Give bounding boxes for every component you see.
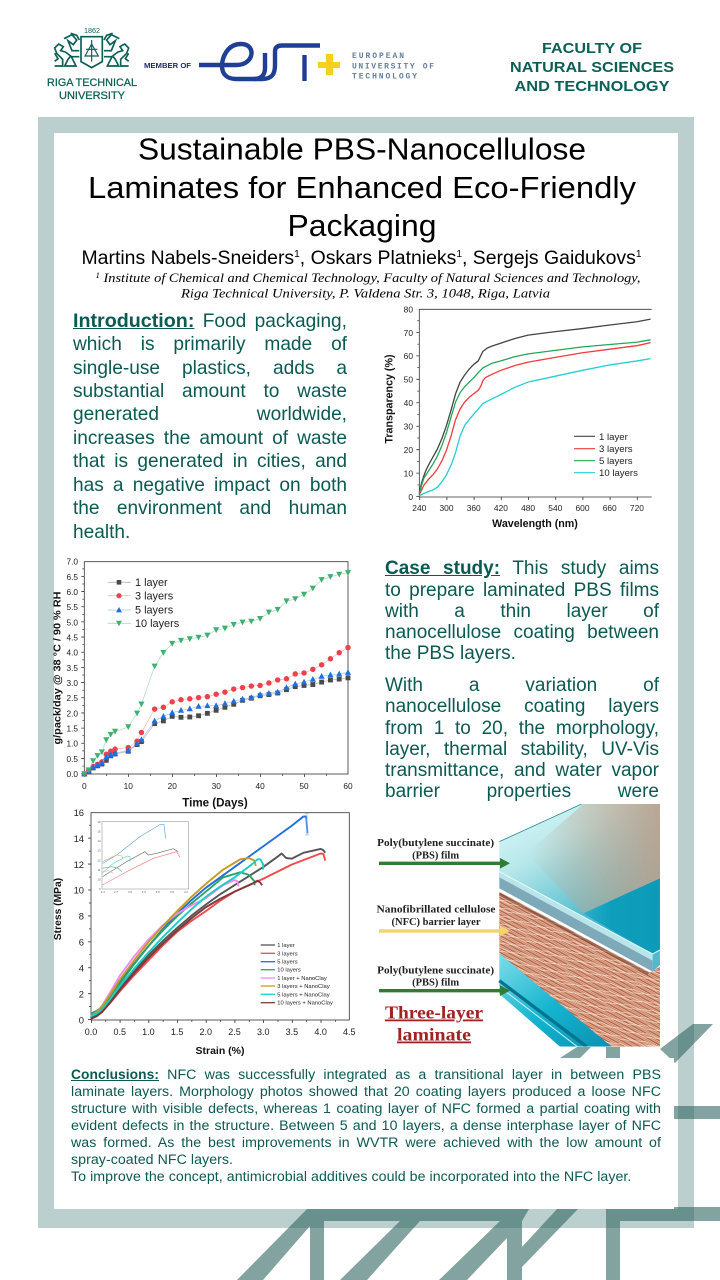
title — [88, 132, 637, 243]
chart inset: zoomed curves: 10 — [97, 877, 101, 881]
text block: case study: Case study: This study aims — [385, 558, 659, 579]
chart: stress vs strain: 6 — [79, 937, 84, 948]
chart: transparency vs wavelength: 420 — [494, 503, 508, 513]
chart: water vapor transmission over time — [52, 557, 353, 810]
text block: conclusions: was formed. As the best improvements in WVTR were achieved with the low amount of — [71, 1134, 661, 1150]
chart: stress vs strain: 4.0 — [314, 1027, 327, 1037]
heading: faculty name: FACULTY OF — [542, 40, 642, 57]
title: Laminates for Enhanced Eco-Friendly — [88, 170, 637, 205]
chart: stress vs strain: 1.0 — [142, 1027, 155, 1037]
chart inset: zoomed curves: 9 — [99, 887, 101, 891]
title: Packaging — [288, 208, 436, 243]
diagram: three-layer laminate: Three-layer — [385, 1002, 483, 1022]
chart: transparency vs wavelength: 10 — [404, 468, 413, 478]
chart: stress vs strain: 0 — [79, 1014, 84, 1025]
text block: introduction: which is primarily made of — [73, 334, 347, 355]
NFC fibre layer — [499, 892, 660, 1047]
chart: stress vs strain: 14 — [74, 833, 84, 844]
authors: , Sergejs Gaidukovs — [462, 248, 636, 269]
logo: Riga Technical University: 1862 — [84, 26, 100, 35]
chart: stress vs strain: 2.5 — [228, 1027, 241, 1037]
diagram: three-layer laminate: (NFC) barrier layer — [391, 917, 481, 928]
chart: water vapor transmission over time: 7.0 — [66, 557, 78, 567]
chart: transparency vs wavelength: 10 layers — [599, 468, 638, 479]
chart: water vapor transmission over time: 6.5 — [66, 572, 78, 582]
affiliation: Institute of Chemical and Chemical Technology, Faculty of Natural Sciences and Technology, — [100, 270, 640, 285]
decorative lattice of teal strokes — [237, 1024, 720, 1280]
text block: case study: nanocellulose coating between — [385, 622, 659, 643]
chart: water vapor transmission over time: 1.0 — [66, 739, 78, 749]
chart: water vapor transmission over time: 0.5 — [66, 754, 78, 764]
text block: introduction: generated worldwide, — [73, 404, 347, 425]
chart: water vapor transmission over time: 50 — [299, 781, 309, 791]
chart: transparency vs wavelength: 80 — [404, 304, 413, 314]
chart: water vapor transmission over time: 3 layers — [135, 590, 174, 602]
chart inset: zoomed curves — [97, 820, 189, 894]
diagram: three-layer laminate: (PBS) film — [412, 850, 459, 862]
chart legend: stress curves: 10 layers — [277, 968, 301, 974]
chart: stress vs strain: 3.5 — [286, 1027, 298, 1037]
text block: study variation: With a variation of — [385, 675, 659, 696]
logo: Riga Technical University: RIGA TECHNICAL — [47, 77, 137, 89]
chart: water vapor transmission over time: 3.0 — [66, 678, 78, 688]
chart legend: stress curves: 1 layer + NanoClay — [277, 976, 327, 982]
chart: water vapor transmission over time: 5.5 — [66, 602, 78, 612]
chart: stress vs strain — [53, 807, 356, 1057]
diagram: three-layer laminate: Poly(butylene succinate) — [377, 838, 495, 849]
text block: case study: the PBS layers. — [385, 643, 516, 664]
chart: water vapor transmission over time: g/pack/day @ 38 °C / 90 % RH — [52, 592, 64, 744]
label: member of: MEMBER OF — [144, 61, 191, 70]
arrows — [379, 858, 510, 996]
logo: European University of Technology: TECHNOLOGY — [352, 72, 417, 82]
chart: stress vs strain: 0.5 — [113, 1027, 126, 1037]
text block: conclusions: laminate layers. Morphology photos showed that 20 coating layers produced a loose NFC — [71, 1084, 661, 1100]
chart: water vapor transmission over time: 6.0 — [66, 587, 78, 597]
chart: water vapor transmission over time: 0.0 — [66, 769, 78, 779]
chart: transparency vs wavelength: 1 layer — [599, 432, 629, 443]
diagram: three-layer laminate — [374, 804, 660, 1047]
chart: stress vs strain: 10 — [74, 885, 84, 896]
chart: water vapor transmission over time: Time (Days) — [182, 796, 248, 810]
chart inset: zoomed curves: 15 — [97, 830, 101, 834]
chart: transparency vs wavelength: 720 — [630, 503, 644, 513]
lower PBS sheet — [499, 953, 623, 1047]
chart: stress vs strain: 8 — [79, 911, 84, 922]
chart: stress vs strain: Stress (MPa) — [53, 878, 64, 940]
chart: transparency vs wavelength: 30 — [404, 422, 413, 432]
authors: , Oskars Platnieks — [300, 248, 456, 269]
chart: water vapor transmission over time: 10 layers — [135, 618, 180, 630]
affiliation: Riga Technical University, P. Valdena Str. 3, 1048, Riga, Latvia — [180, 286, 551, 301]
text block: study variation: nanocellulose coating layers — [385, 696, 659, 717]
text block: conclusions — [71, 1066, 661, 1184]
diagram: three-layer laminate: Nanofibrillated cellulose — [376, 904, 496, 916]
chart: stress vs strain: 4.5 — [343, 1027, 356, 1037]
chart inset: zoomed curves: 3.6 — [156, 890, 160, 894]
diagram: three-layer laminate: Poly(butylene succinate) — [377, 966, 495, 976]
chart: water vapor transmission over time: 1 layer — [135, 577, 168, 589]
logo: European University of Technology: EUROPEAN — [352, 52, 404, 61]
chart legend: stress curves: 10 layers + NanoClay — [277, 1001, 333, 1007]
chart: water vapor transmission over time: 30 — [212, 781, 221, 791]
chart: transparency vs wavelength: Wavelength (nm) — [492, 518, 578, 530]
chart: water vapor transmission over time: 1.5 — [66, 724, 78, 734]
text block: introduction — [73, 310, 347, 543]
logo: European University of Technology: UNIVERSITY OF — [352, 62, 434, 71]
chart legend: stress curves: 3 layers — [277, 951, 298, 957]
text block: introduction: Introduction: Food packaging, — [73, 310, 347, 332]
chart inset: zoomed curves: 13 — [97, 849, 101, 853]
chart: stress vs strain: 0.0 — [85, 1027, 97, 1037]
text block: introduction: that is generated in cities, and — [73, 451, 347, 472]
upper PBS sheet — [499, 804, 660, 972]
heading: faculty name: AND TECHNOLOGY — [514, 78, 670, 95]
chart: transparency vs wavelength: 70 — [404, 328, 413, 338]
text block: study variation: layer, thermal stability, UV-Vis — [385, 739, 659, 760]
text block: case study: with a thin layer of — [385, 601, 659, 622]
text block: conclusions: evident defects in the structure. Between 5 and 10 layers, a dense interphase layer of NFC — [71, 1118, 661, 1134]
chart: water vapor transmission over time: 5 layers — [135, 605, 174, 617]
chart: stress vs strain: 1.5 — [171, 1027, 183, 1037]
panel: poster frame — [38, 117, 694, 1228]
text block: study variation — [385, 675, 660, 802]
chart inset: zoomed curves: 2.7 — [114, 890, 118, 894]
chart: stress vs strain: Strain (%) — [195, 1045, 245, 1057]
chart: transparency vs wavelength: 600 — [576, 503, 590, 513]
chart inset: zoomed curves: 3.9 — [170, 890, 174, 894]
chart: transparency vs wavelength: 360 — [467, 503, 481, 513]
chart: transparency vs wavelength: 5 layers — [599, 456, 633, 467]
text block: introduction: increases the amount of waste — [73, 428, 347, 449]
chart: transparency vs wavelength: 480 — [521, 503, 535, 513]
chart inset: zoomed curves: 16 — [97, 820, 101, 824]
chart: water vapor transmission over time: 5.0 — [66, 617, 78, 627]
chart: transparency vs wavelength: 240 — [412, 503, 427, 513]
text block: introduction: has a negative impact on both — [73, 475, 347, 496]
chart legend: stress curves: 5 layers — [277, 960, 298, 966]
chart: water vapor transmission over time: 10 — [124, 781, 133, 791]
chart inset: zoomed curves: 4.2 — [184, 890, 188, 894]
chart inset: zoomed curves: 3.3 — [142, 890, 146, 894]
text block: study variation: barrier properties were — [385, 781, 659, 802]
text block: study variation: transmittance, and water vapor — [385, 760, 659, 781]
chart: water vapor transmission over time: 2.5 — [66, 693, 78, 703]
logo: Riga Technical University: UNIVERSITY — [59, 90, 125, 102]
chart: transparency vs wavelength: 40 — [404, 398, 413, 408]
affiliation: 1 — [96, 271, 100, 280]
chart legend: stress curves: 3 layers + NanoClay — [277, 984, 330, 990]
chart: transparency vs wavelength: 0 — [408, 492, 413, 502]
chart legend: stress curves: 5 layers + NanoClay — [277, 992, 330, 998]
text block: introduction: health. — [73, 522, 130, 543]
chart: water vapor transmission over time: 40 — [255, 781, 265, 791]
affiliation — [96, 270, 640, 301]
chart inset: zoomed curves: 3.0 — [128, 890, 132, 894]
chart: transparency vs wavelength: 20 — [404, 445, 413, 455]
chart: water vapor transmission over time: 4.5 — [66, 632, 78, 642]
chart inset: zoomed curves: 14 — [97, 839, 101, 843]
chart: stress vs strain: 2.0 — [200, 1027, 212, 1037]
text block: conclusions: Conclusions: NFC was successfully integrated as a transitional layer in between PBS — [71, 1066, 661, 1082]
text block: introduction: substantial amount to waste — [73, 381, 347, 402]
chart: transparency vs wavelength: 3 layers — [599, 444, 633, 455]
chart: water vapor transmission over time: 4.0 — [66, 648, 78, 658]
text block: conclusions: To improve the concept, antimicrobial additives could be incorporated into the NFC layer. — [71, 1168, 631, 1184]
text block: conclusions: spray-coated NFC layers. — [71, 1152, 233, 1168]
authors: 1 — [456, 249, 462, 260]
chart: transparency vs wavelength: 660 — [603, 503, 617, 513]
diagram: three-layer laminate: laminate — [397, 1024, 471, 1044]
text block: study variation: from 1 to 20, the morphology, — [385, 718, 659, 739]
chart inset: zoomed curves: 12 — [97, 858, 101, 862]
chart: water vapor transmission over time: 2.0 — [66, 708, 78, 718]
chart: transparency vs wavelength: 300 — [440, 503, 454, 513]
chart: transparency vs wavelength: Transparency (%) — [384, 354, 396, 444]
chart legend: stress curves: 1 layer — [277, 943, 295, 949]
logo: European University of Technology — [199, 44, 434, 82]
chart: stress vs strain: 16 — [74, 807, 84, 818]
authors: 1 — [636, 249, 642, 260]
chart legend: stress curves — [261, 943, 333, 1007]
chart inset: zoomed curves: 11 — [98, 868, 101, 872]
chart: transparency vs wavelength — [384, 304, 652, 530]
chart: stress vs strain: 2 — [79, 988, 84, 999]
text block: introduction: the environment and human — [73, 498, 347, 519]
text block: case study: to prepare laminated PBS films — [385, 580, 659, 600]
chart: stress vs strain: 3.0 — [257, 1027, 269, 1037]
chart: transparency vs wavelength: 50 — [404, 375, 413, 385]
logo: Riga Technical University — [47, 26, 137, 102]
chart: stress vs strain: 12 — [74, 859, 84, 870]
authors: 1 — [294, 249, 300, 260]
chart: transparency vs wavelength: 60 — [404, 351, 413, 361]
chart: stress vs strain: 4 — [79, 962, 84, 974]
chart: water vapor transmission over time: 60 — [343, 781, 353, 791]
text block: case study — [385, 558, 660, 664]
diagram: three-layer laminate: (PBS) film — [412, 978, 459, 988]
chart: water vapor transmission over time: 3.5 — [66, 663, 78, 673]
heading: faculty name: NATURAL SCIENCES — [510, 59, 674, 76]
chart: transparency vs wavelength: 540 — [548, 503, 563, 513]
chart inset: zoomed curves: 2.4 — [101, 890, 105, 894]
heading: faculty name — [510, 40, 674, 95]
text block: introduction: single-use plastics, adds a — [73, 358, 347, 378]
conclusions white backing — [54, 1058, 674, 1209]
chart: water vapor transmission over time: 20 — [168, 781, 177, 791]
text block: conclusions: structure with visible defects, whereas 1 coating layer of NFC formed a partial coating with — [71, 1100, 661, 1116]
authors: Martins Nabels-Sneiders — [82, 248, 290, 269]
chart: water vapor transmission over time: 0 — [82, 781, 87, 791]
title: Sustainable PBS-Nanocellulose — [138, 132, 586, 166]
